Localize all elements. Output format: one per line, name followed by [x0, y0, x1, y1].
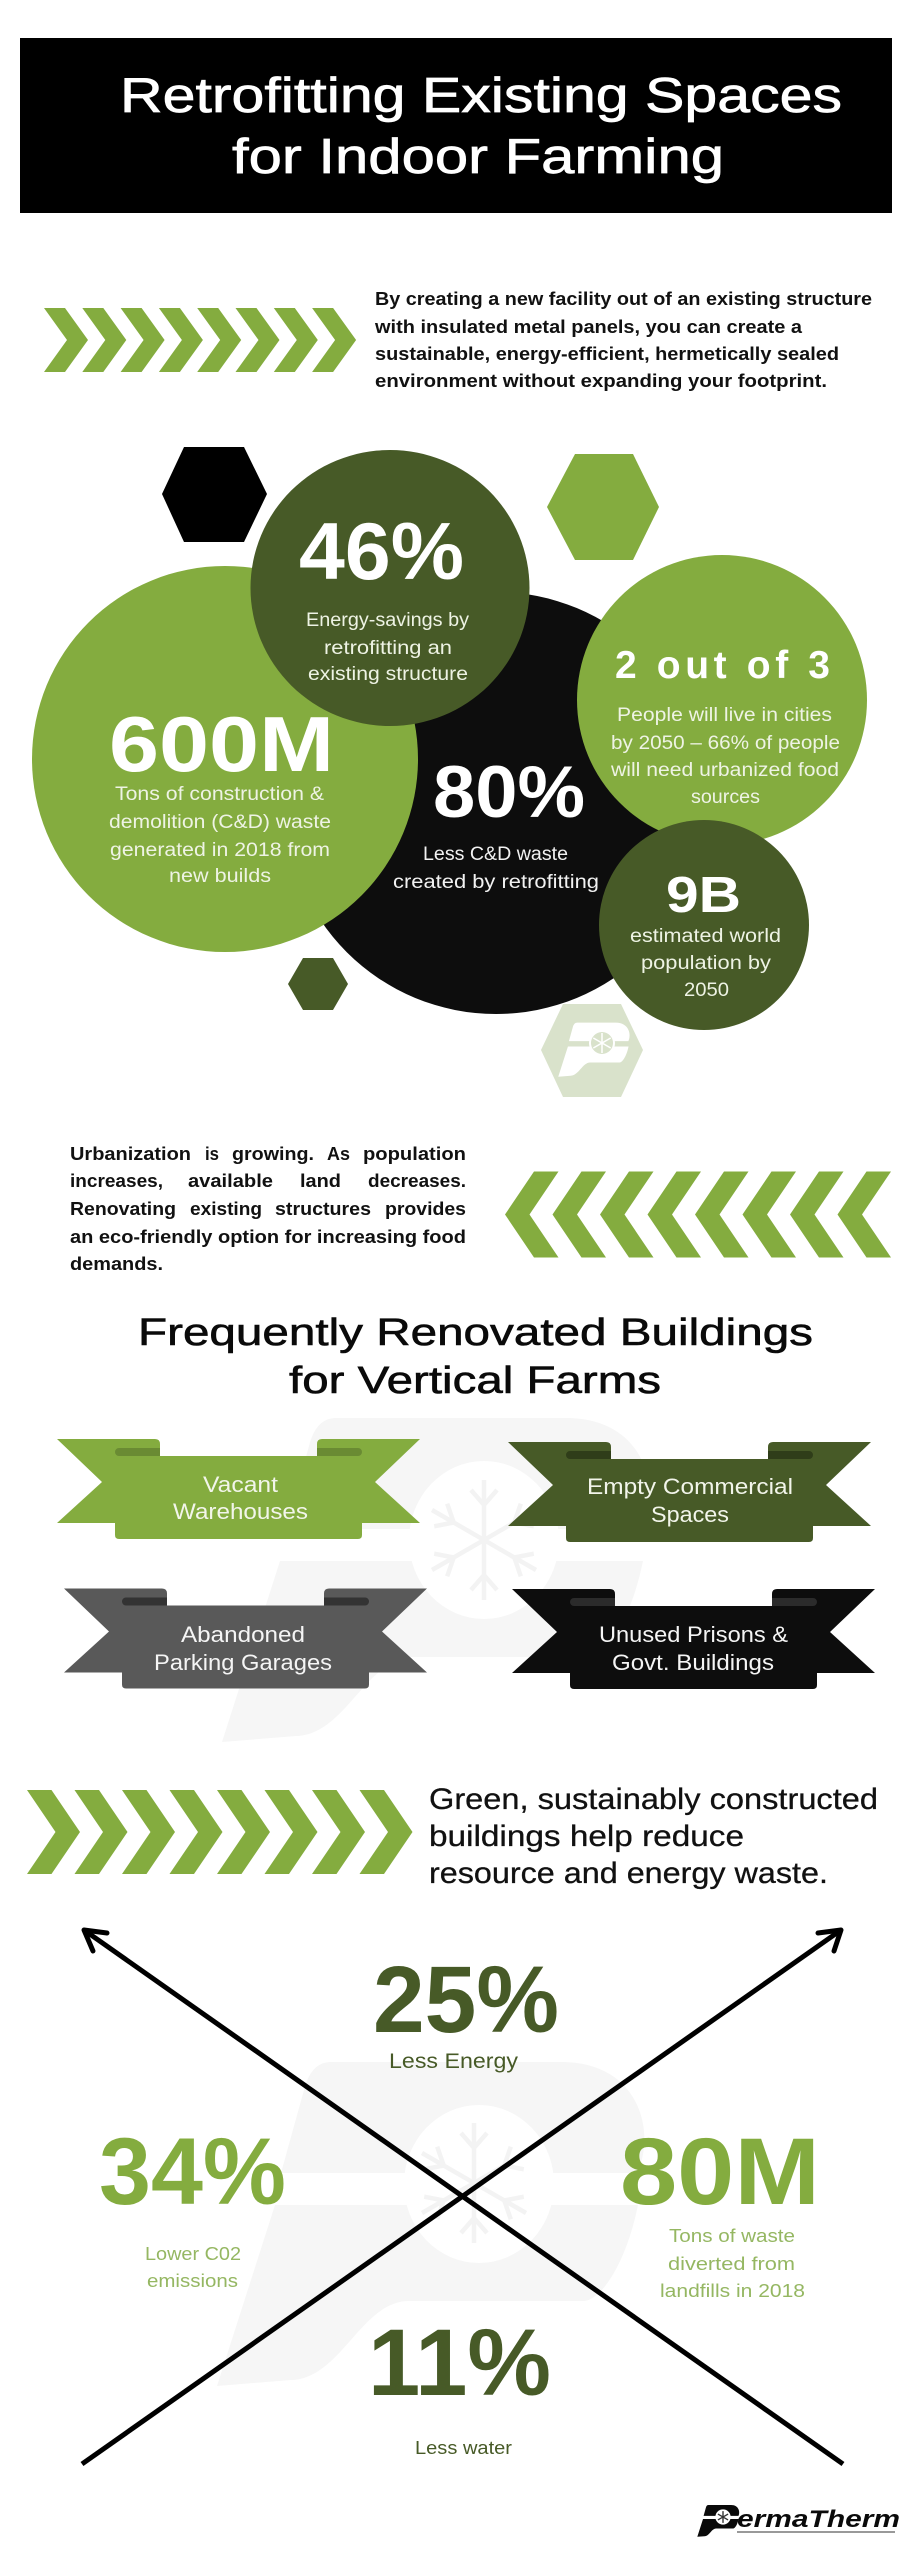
ribbon label: Empty Commercial: [587, 1474, 793, 1499]
icon: right-pointing chevrons, intro: [44, 308, 356, 372]
stat circle: 80% less C&D waste: [285, 592, 707, 1014]
stat circle: 9B world population: [599, 820, 809, 1030]
ribbon label: [599, 1622, 788, 1675]
stat caption: 9B: [630, 926, 781, 1001]
ribbon label: Parking Garages: [154, 1650, 332, 1675]
stat caption: 600M: demolition (C&D) waste: [109, 812, 331, 833]
intro paragraph: [374, 289, 872, 391]
ribbon label: [154, 1622, 332, 1675]
stat caption: 9B: population by: [641, 953, 772, 974]
stat caption: 600M: [109, 784, 331, 887]
urbanization paragraph: [70, 1144, 466, 1274]
urbanization paragraph: land: [300, 1171, 341, 1191]
stat circle: 46% energy savings: [250, 450, 530, 726]
text: green buildings statement: resource and energy waste.: [429, 1857, 828, 1890]
urbanization paragraph: Renovating: [70, 1199, 176, 1219]
stat circle: 600M tons of waste: [32, 566, 418, 952]
title text: for Indoor Farming: [232, 130, 724, 184]
ribbon: vacant warehouses: [57, 1439, 420, 1539]
stat number: 9B: 9B: [666, 866, 741, 923]
stat: 25% less energy: 25%: [373, 1947, 559, 2053]
stat caption: 80%: created by retrofitting: [393, 872, 599, 893]
stat caption: 2 out of 3: will need urbanized food: [610, 760, 839, 781]
caption: lower CO2 emissions: emissions: [147, 2271, 238, 2291]
caption: tons of waste diverted: landfills in 2018: [660, 2281, 805, 2301]
stat number: 80%: 80%: [433, 752, 585, 833]
ribbon label: Abandoned: [181, 1622, 305, 1647]
stat caption: 46%: retrofitting an: [324, 638, 452, 659]
icon: right-pointing chevrons, green buildings: [27, 1790, 412, 1874]
intro paragraph: with insulated metal panels, you can create a: [374, 317, 803, 337]
wordmark: ermaTherm: [737, 2506, 900, 2533]
title text: [120, 69, 842, 184]
urbanization paragraph: an eco-friendly option for increasing food: [70, 1227, 466, 1247]
caption: tons of waste diverted: [660, 2226, 805, 2301]
ribbon label: Vacant: [203, 1472, 278, 1497]
intro paragraph: By creating a new facility out of an existing structure: [375, 289, 872, 309]
title banner: [20, 38, 892, 213]
heading: frequently renovated buildings: [138, 1312, 813, 1402]
stat: 80M tons diverted: [620, 2119, 820, 2301]
stat number: 2 out of 3: 2 out of 3: [615, 644, 830, 687]
ribbon: abandoned parking garages: [64, 1588, 427, 1688]
caption: tons of waste diverted: Tons of waste: [669, 2226, 795, 2246]
urbanization paragraph: demands.: [70, 1254, 163, 1274]
urbanization paragraph: available: [188, 1171, 273, 1191]
logo: PermaTherm: [697, 2505, 900, 2537]
stat caption: 46%: Energy-savings by: [306, 610, 470, 631]
heading: frequently renovated buildings: Frequently Renovated Buildings: [138, 1312, 813, 1354]
ribbon: empty commercial spaces: [508, 1442, 871, 1542]
intro paragraph: environment without expanding your footprint.: [375, 371, 827, 391]
watermark logo: statistics section: [217, 2062, 644, 2386]
ribbon label: Govt. Buildings: [612, 1650, 774, 1675]
urbanization paragraph: is: [205, 1144, 219, 1164]
urbanization paragraph: existing: [190, 1199, 262, 1219]
ribbon label: [587, 1474, 793, 1527]
hexagon: light green: [547, 454, 659, 560]
stat caption: 600M: new builds: [169, 866, 271, 887]
arrow: up-left diagonal: [84, 1930, 843, 2464]
icon: P mark: [697, 2505, 739, 2537]
caption: tons of waste diverted: diverted from: [668, 2254, 795, 2274]
urbanization paragraph: structures: [275, 1199, 371, 1219]
hexagon: dark green: [288, 958, 348, 1010]
urbanization paragraph: provides: [385, 1199, 466, 1219]
caption: lower CO2 emissions: [145, 2244, 241, 2291]
ribbon label: Unused Prisons &: [599, 1622, 788, 1647]
watermark logo: buildings section: [222, 1418, 649, 1742]
stat caption: 2 out of 3: by 2050 – 66% of people: [611, 733, 840, 754]
caption: less water: Less water: [415, 2438, 512, 2458]
urbanization paragraph: increases,: [70, 1171, 163, 1191]
stat caption: 80%: [393, 844, 599, 893]
ribbon label: Warehouses: [173, 1499, 308, 1524]
icon: pale P logo: [558, 1023, 630, 1077]
stat caption: 2 out of 3: [610, 705, 840, 808]
urbanization paragraph: Urbanization: [70, 1144, 191, 1164]
hexagon: black: [162, 447, 267, 542]
icon: left-pointing chevrons: [505, 1172, 891, 1258]
stat caption: 2 out of 3: People will live in cities: [617, 705, 832, 726]
stat: 11% less water: 11%: [368, 2310, 551, 2416]
urbanization paragraph: growing.: [232, 1144, 314, 1164]
ribbon: unused prisons and govt buildings: [512, 1589, 875, 1689]
hexagon: pale logo badge: [541, 1004, 643, 1097]
caption: lower CO2 emissions: Lower C02: [145, 2244, 241, 2264]
stat caption: 46%: [306, 610, 470, 685]
arrow: up-right diagonal: [82, 1930, 841, 2464]
text: green buildings statement: Green, sustainably constructed: [429, 1783, 878, 1816]
stat caption: 80%: Less C&D waste: [423, 844, 568, 865]
heading: frequently renovated buildings: for Vertical Farms: [289, 1360, 661, 1402]
title text: Retrofitting Existing Spaces: [120, 69, 842, 123]
urbanization paragraph: As: [327, 1144, 350, 1164]
urbanization paragraph: decreases.: [368, 1171, 466, 1191]
text: green buildings statement: [429, 1783, 878, 1890]
stat caption: 9B: estimated world: [630, 926, 781, 947]
stat number: 600M: 600M: [109, 700, 334, 788]
stat: 80M tons diverted: 80M: [620, 2119, 820, 2225]
stat caption: 600M: Tons of construction &: [115, 784, 324, 805]
stat caption: 2 out of 3: sources: [691, 787, 760, 808]
ribbon label: [173, 1472, 308, 1524]
stat: 34% lower CO2: 34%: [99, 2119, 286, 2225]
stat caption: 46%: existing structure: [308, 664, 468, 685]
stat circle: 2 out of 3: [577, 555, 867, 845]
urbanization paragraph: population: [363, 1144, 466, 1164]
stat number: 46%: 46%: [299, 507, 464, 597]
intro paragraph: sustainable, energy-efficient, hermetically sealed: [375, 344, 839, 364]
caption: less energy: Less Energy: [389, 2050, 519, 2073]
ribbon label: Spaces: [651, 1502, 729, 1527]
stat: 34% lower CO2: [99, 2119, 286, 2291]
stat caption: 600M: generated in 2018 from: [110, 840, 330, 861]
text: green buildings statement: buildings help reduce: [429, 1820, 744, 1853]
stat caption: 9B: 2050: [684, 980, 729, 1001]
